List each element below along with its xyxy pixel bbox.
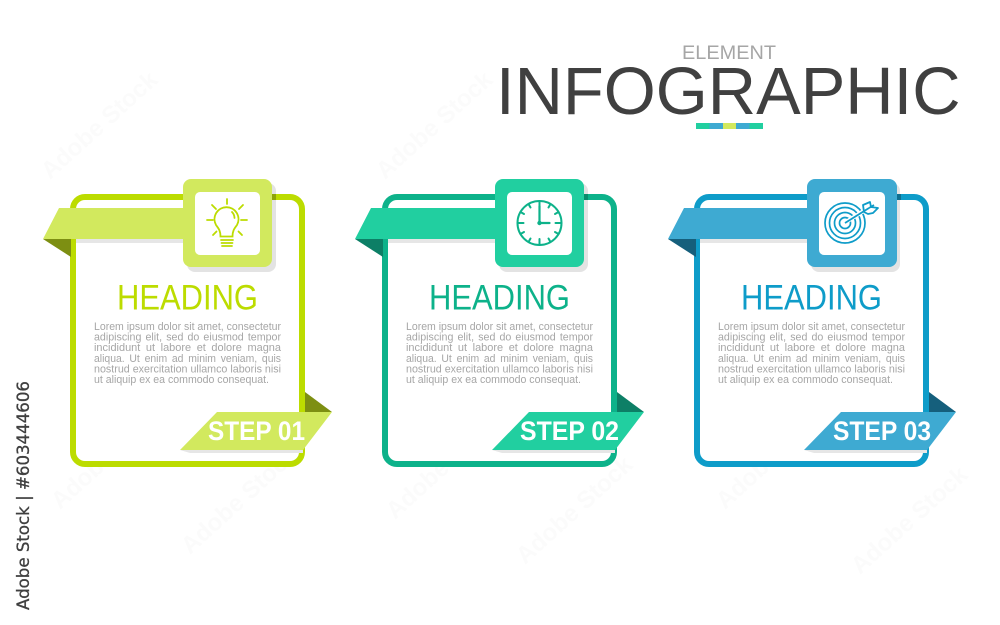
body text: Lorem ipsum dolor sit amet, consectetur: [94, 321, 281, 333]
heading: HEADING: [429, 278, 570, 318]
body text: incididunt ut labore et dolore magna: [718, 342, 906, 354]
text: Adobe Stock: [846, 461, 974, 579]
text: Adobe Stock: [381, 406, 509, 524]
top ribbon: [355, 208, 498, 257]
body text: [406, 321, 594, 386]
body text: adipiscing elit, sed do eiusmod tempor: [94, 332, 281, 344]
card frame: [73, 197, 302, 464]
body text: ut aliquip ex ea commodo consequat.: [406, 374, 581, 386]
body text: Lorem ipsum dolor sit amet, consectetur: [406, 321, 593, 333]
text: Adobe Stock: [176, 441, 304, 559]
body text: aliqua. Ut enim ad minim veniam, quis: [94, 353, 281, 365]
body text: adipiscing elit, sed do eiusmod tempor: [406, 332, 593, 344]
icon tile: target: [807, 179, 901, 272]
body text: [718, 321, 906, 386]
stock id vertical text: Adobe Stock | #603444606: [14, 381, 33, 610]
panel: step 03: [668, 179, 956, 464]
body text: ut aliquip ex ea commodo consequat.: [94, 374, 269, 386]
panel: step 02: [355, 179, 644, 464]
heading: HEADING: [117, 278, 258, 318]
body text: nostrud exercitation ullamco laboris nisi: [94, 363, 281, 375]
body text: Lorem ipsum dolor sit amet, consectetur: [718, 321, 905, 333]
title colour bar: [696, 123, 763, 129]
top ribbon: [43, 208, 186, 257]
icon tile: clock: [495, 179, 588, 272]
text: Adobe Stock: [371, 66, 499, 184]
body text: adipiscing elit, sed do eiusmod tempor: [718, 332, 905, 344]
step ribbon: [180, 392, 332, 453]
text: Adobe Stock: [711, 396, 839, 514]
body text: nostrud exercitation ullamco laboris nisi: [718, 363, 905, 375]
card frame: [697, 197, 926, 464]
text: Adobe Stock: [46, 396, 174, 514]
step ribbon: STEP 02: [520, 416, 619, 446]
body text: [94, 321, 282, 386]
card frame: [385, 197, 614, 464]
title: [496, 42, 960, 129]
text: Adobe Stock: [511, 451, 639, 569]
body text: nostrud exercitation ullamco laboris nisi: [406, 363, 593, 375]
step ribbon: [492, 392, 644, 453]
body text: aliqua. Ut enim ad minim veniam, quis: [406, 353, 593, 365]
text: Adobe Stock: [36, 66, 164, 184]
step ribbon: [804, 392, 956, 453]
body text: incididunt ut labore et dolore magna: [406, 342, 594, 354]
body text: incididunt ut labore et dolore magna: [94, 342, 282, 354]
panel: step 01: [43, 179, 332, 464]
heading: INFOGRAPHIC: INFOGRAPHIC: [496, 54, 960, 129]
icon tile: light bulb: [183, 179, 276, 272]
heading: HEADING: [741, 278, 882, 318]
body text: ut aliquip ex ea commodo consequat.: [718, 374, 893, 386]
eyebrow: ELEMENT: ELEMENT: [682, 42, 776, 64]
step ribbon: STEP 03: [833, 416, 931, 446]
top ribbon: [668, 208, 811, 257]
body text: aliqua. Ut enim ad minim veniam, quis: [718, 353, 905, 365]
step ribbon: STEP 01: [208, 416, 305, 446]
